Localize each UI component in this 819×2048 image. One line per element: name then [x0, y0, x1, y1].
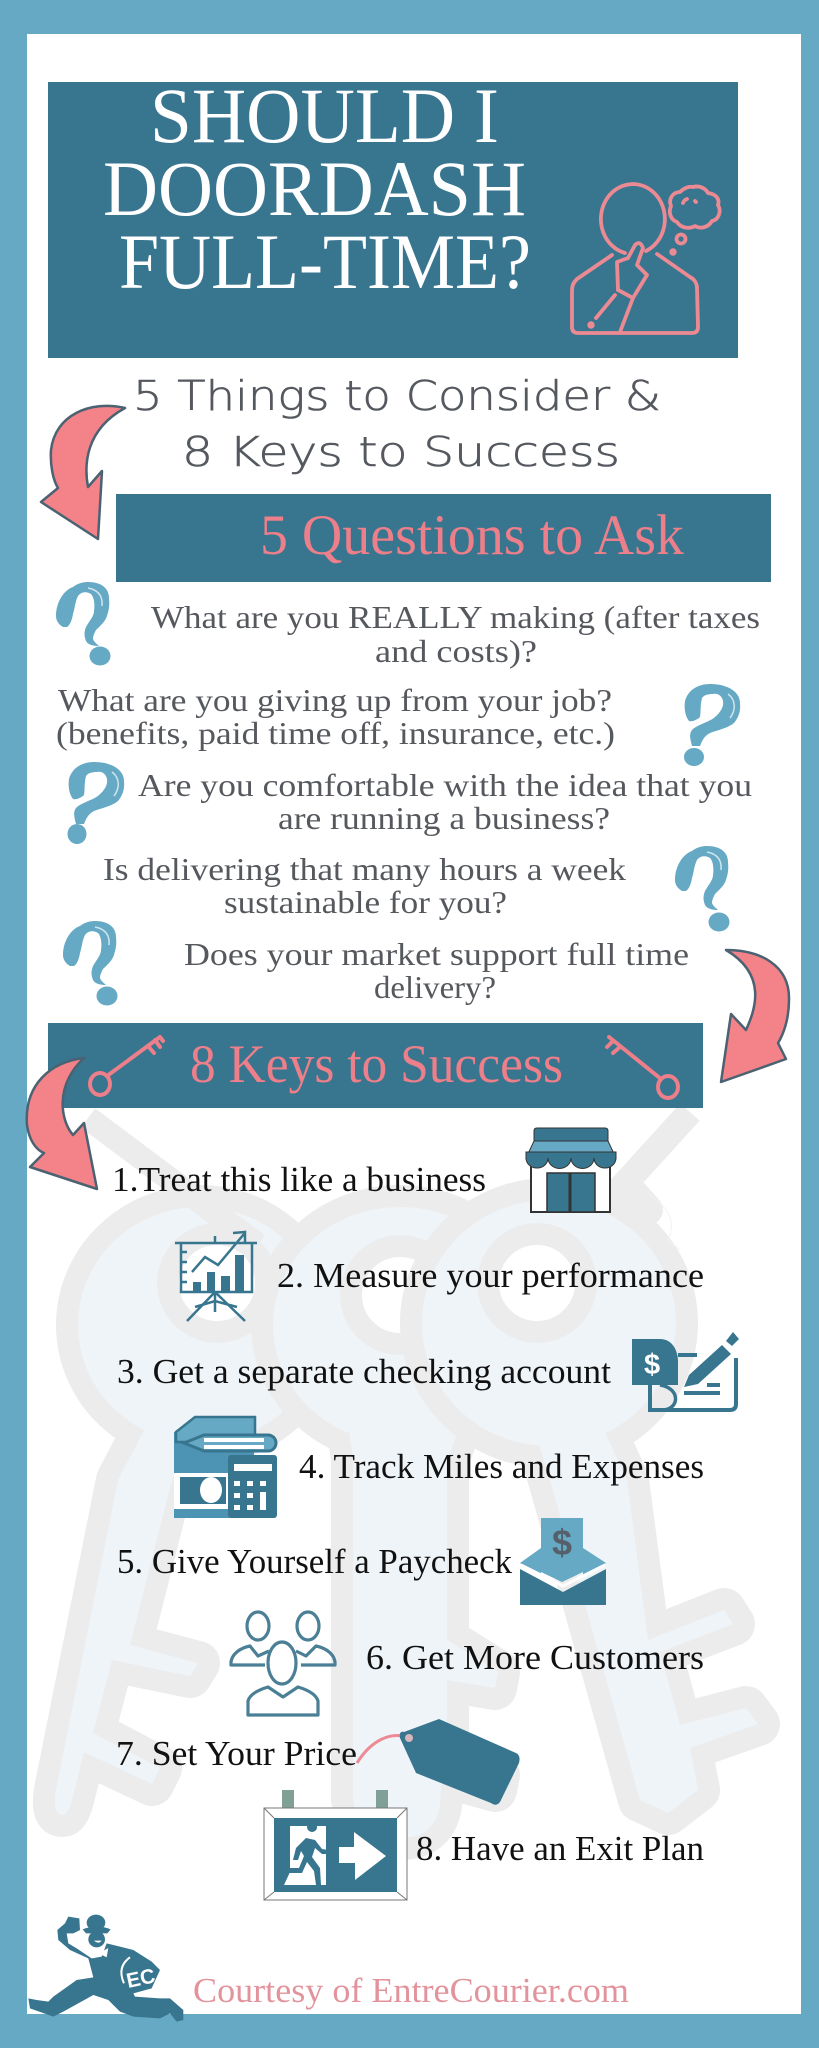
logo: running courier [28, 1915, 183, 2022]
question 3: are running a business? [278, 800, 610, 836]
icon: storefront [526, 1128, 616, 1212]
arrow: keys heading to list [27, 1058, 97, 1189]
question 1 [151, 599, 760, 669]
icon: paycheck envelope: $ [552, 1522, 572, 1563]
icon: paycheck envelope [520, 1518, 606, 1605]
key 6 text: 6. Get More Customers [366, 1638, 704, 1677]
arrow: questions to keys [721, 950, 789, 1082]
subtitle [133, 372, 661, 476]
title banner [48, 72, 738, 358]
key 5 text: 5. Give Yourself a Paycheck [117, 1542, 512, 1581]
icon: customers group [231, 1612, 335, 1715]
question 1: What are you REALLY making (after taxes [151, 599, 760, 635]
question 5: delivery? [374, 969, 496, 1005]
question 3: Are you comfortable with the idea that you [138, 767, 752, 803]
question 5 [184, 936, 689, 1005]
key 1 text: 1.Treat this like a business [112, 1160, 486, 1199]
key 8 text: 8. Have an Exit Plan [416, 1829, 704, 1868]
subtitle: 8 Keys to Success [182, 428, 620, 476]
heading: 5 Questions to Ask [116, 494, 771, 582]
icon: left key [90, 1037, 163, 1095]
title text: SHOULD I [150, 72, 499, 159]
icon: thinking person [572, 184, 720, 333]
subtitle: 5 Things to Consider & [133, 372, 661, 420]
icon: price tag [357, 1719, 520, 1805]
key 2 text: 2. Measure your performance [277, 1256, 704, 1295]
icon: expenses paperwork and calculator [174, 1417, 277, 1518]
arrow: subtitle to questions [41, 406, 125, 539]
title text: DOORDASH [103, 145, 526, 232]
question 2 [56, 682, 615, 751]
title text [103, 72, 531, 305]
logo: running courier: EC [124, 1964, 157, 1993]
key 7 text: 7. Set Your Price [116, 1734, 357, 1773]
question 5: Does your market support full time [184, 936, 689, 972]
icon: question mark 2 [684, 684, 740, 766]
key 3 text: 3. Get a separate checking account [117, 1352, 611, 1391]
question 1: and costs)? [375, 633, 537, 669]
courtesy credit: Courtesy of EntreCourier.com [193, 1971, 629, 2010]
icon: question mark 4 [675, 846, 730, 932]
heading: 8 Keys to Success [48, 1023, 703, 1108]
question 4 [103, 851, 626, 920]
icon: question mark 5 [63, 921, 118, 1006]
question 2: (benefits, paid time off, insurance, etc.) [56, 715, 615, 751]
heading: 5 Questions to Ask: 5 Questions to Ask [260, 504, 684, 567]
watermark: three large keys [55, 1112, 758, 1838]
icon: performance chart [175, 1232, 257, 1321]
icon: check and pen [632, 1332, 739, 1410]
icon: right key [607, 1037, 678, 1098]
icon: question mark 3 [68, 762, 124, 844]
question 4: sustainable for you? [224, 884, 507, 920]
question 3 [138, 767, 752, 836]
icon: check and pen: $ [644, 1349, 660, 1381]
icon: exit sign [264, 1790, 407, 1900]
heading: 8 Keys to Success: 8 Keys to Success [190, 1034, 563, 1094]
icon: question mark 1 [56, 582, 110, 666]
question 2: What are you giving up from your job? [58, 682, 612, 718]
question 4: Is delivering that many hours a week [103, 851, 626, 887]
title text: FULL-TIME? [119, 218, 531, 305]
key 4 text: 4. Track Miles and Expenses [299, 1447, 704, 1486]
